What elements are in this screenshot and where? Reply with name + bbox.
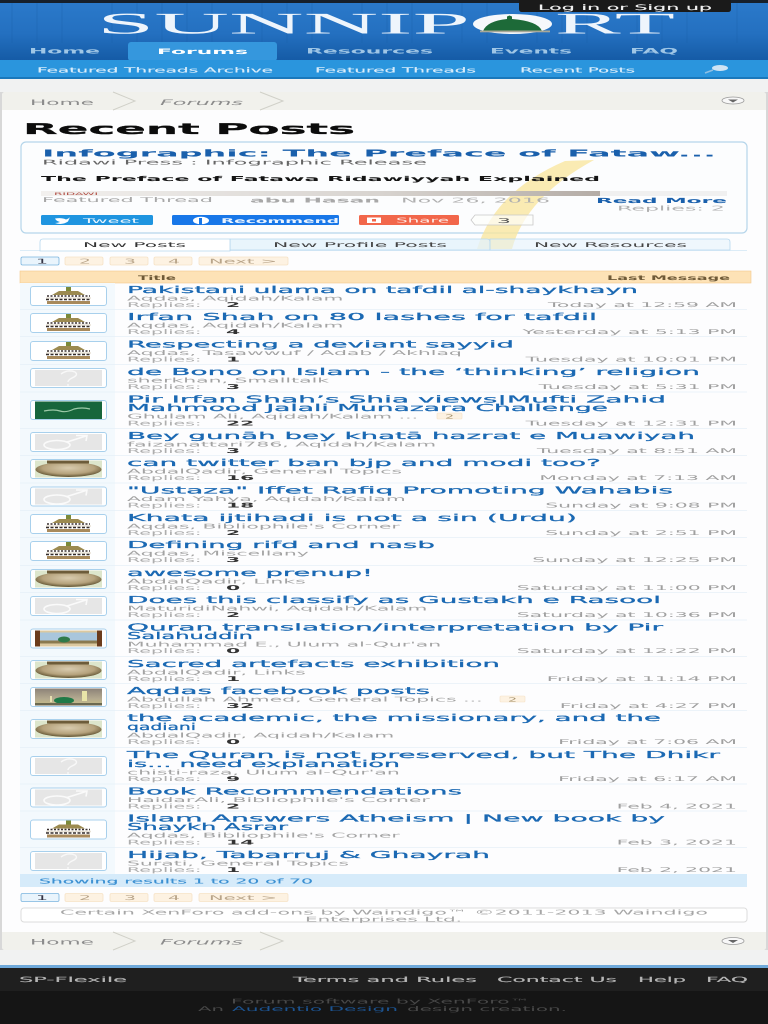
author and forum: Surati, General Topics [127, 859, 351, 867]
avatar [30, 596, 106, 616]
replies [127, 383, 241, 391]
breadcrumb bottom: Home [30, 938, 95, 946]
table header [20, 271, 751, 283]
last message date: Today at 12:59 AM [545, 301, 738, 309]
avatar [30, 460, 106, 478]
thread title: Aqdas facebook posts [127, 686, 430, 697]
main navigation: Events [490, 46, 574, 56]
replies [127, 502, 256, 510]
row 19 [30, 814, 737, 846]
button: recommend [172, 215, 340, 225]
replies: 32 [226, 702, 256, 710]
row 13 [30, 622, 738, 655]
thread title: Defining rifd and nasb [127, 540, 435, 551]
avatar [30, 688, 106, 706]
author and forum: AbdalQadir, Aqidah/Kalam [127, 731, 394, 739]
thread meta: abu Hasan [250, 196, 381, 204]
replies [127, 420, 256, 428]
featured subtitle: Ridawi Press : Infographic Release [42, 158, 427, 166]
replies: Replies: [127, 502, 201, 510]
footer links: FAQ [706, 975, 749, 984]
replies: Replies: [127, 775, 201, 783]
thread title: Pir Irfan Shah’s Shia views|Mufti Zahid [127, 394, 666, 406]
infographic image strip [41, 191, 727, 196]
avatar [30, 514, 106, 534]
last message date: Feb 3, 2021 [617, 838, 737, 846]
replies: Replies: [127, 356, 201, 364]
replies: Replies: [127, 802, 201, 810]
replies: 1 [226, 866, 241, 874]
avatar [30, 342, 106, 360]
tabs [20, 239, 747, 251]
tab: new posts: New Posts [83, 241, 188, 249]
icon: search [705, 65, 728, 73]
thread title: Hijab, Tabarruj & Ghayrah [127, 850, 490, 861]
row 15 [30, 686, 738, 710]
last message date: Saturday at 12:22 PM [517, 647, 738, 655]
thread title: Khata ijtihadi is not a sin (Urdu) [127, 513, 577, 524]
last message date: Yesterday at 5:13 PM [519, 328, 738, 336]
button: tweet [41, 215, 153, 225]
replies [127, 447, 241, 455]
replies: Replies: [127, 383, 201, 391]
header banner [0, 0, 768, 61]
replies [127, 866, 241, 874]
results summary bar [20, 874, 747, 887]
decorative yellow swoosh [477, 160, 594, 249]
replies: 1 [226, 675, 241, 683]
avatar [30, 660, 106, 680]
last message date: Saturday at 11:00 PM [517, 584, 738, 592]
thread title: Does this classify as Gustakh e Rasool [127, 595, 661, 606]
credits: Forum software by XenForo™ [231, 998, 530, 1006]
author and forum: Adam Yahya, Aqidah/Kalam [127, 495, 406, 503]
page badge: 2 [445, 414, 454, 420]
replies: Replies: [127, 738, 201, 746]
replies: 3 [226, 383, 241, 391]
sub navigation bar [0, 60, 768, 79]
replies [127, 611, 241, 619]
thread title: is... need explanation [127, 759, 400, 770]
row 17 [30, 750, 738, 783]
row 14 [30, 659, 738, 683]
replies: Replies: [127, 584, 201, 592]
replies: Replies: [127, 556, 201, 564]
thread title [127, 814, 666, 833]
last message date: Friday at 11:14 PM [547, 675, 738, 683]
pagination bottom: Next > [209, 894, 277, 902]
main navigation: FAQ [630, 46, 678, 56]
last message date: Feb 2, 2021 [617, 866, 737, 874]
copyright notice: Certain XenForo add-ons by Waindigo™ ©2011-2013 Waindigo [60, 908, 708, 916]
thread title: Sacred artefacts exhibition [127, 659, 500, 670]
thread title: awesome prenup! [127, 568, 373, 579]
sub navigation bar: Recent Posts [520, 66, 636, 74]
replies [127, 301, 241, 309]
replies: Replies: [127, 866, 201, 874]
author and forum: Abdullah Ahmed, General Topics ... [127, 695, 483, 703]
avatar [30, 629, 106, 648]
replies [127, 328, 241, 336]
author and forum: faizanattari786, Aqidah/Kalam [127, 440, 436, 448]
replies: 9 [226, 775, 241, 783]
replies: Replies: [127, 702, 201, 710]
avatar [30, 720, 106, 738]
tab: new resources: New Resources [534, 241, 689, 249]
thread title: the academic, the missionary, and the [127, 713, 661, 724]
pagination top: Next > [209, 258, 277, 266]
copyright notice: Enterprises Ltd. [305, 916, 462, 924]
thread meta: Featured Thread [42, 196, 213, 204]
page badge [437, 413, 462, 420]
tab: new profile posts: New Profile Posts [273, 241, 449, 249]
breadcrumb bottom: Forums [160, 938, 243, 946]
button: recommend: Recommend [221, 217, 340, 225]
last message date: Monday at 7:13 AM [539, 474, 738, 482]
thread title: can twitter ban bjp and modi too? [127, 458, 601, 469]
author and forum: Aqdas, Miscellany [127, 549, 309, 557]
row 3 [30, 340, 738, 364]
table header: Last Message [607, 274, 732, 282]
last message date: Sunday at 12:25 PM [532, 556, 738, 564]
avatar [30, 432, 106, 452]
pagination bottom: 1 [36, 894, 48, 902]
row 18 [30, 786, 737, 810]
author and forum: HaidarAli, Bibliophile's Corner [127, 796, 431, 804]
icon: collapse toggle [722, 938, 744, 944]
thread title: Respecting a deviant sayyid [127, 340, 514, 350]
thread title: de Bono on Islam - the ‘thinking’ religion [127, 367, 700, 378]
row 10 [30, 540, 738, 564]
replies: Replies: [127, 611, 201, 619]
replies: 14 [226, 838, 256, 846]
page badge: 2 [508, 696, 517, 704]
avatar [30, 487, 106, 506]
pagination top: 1 [36, 258, 48, 266]
avatar [30, 570, 106, 588]
replies [127, 529, 241, 537]
thread meta [42, 196, 728, 212]
row 16 [30, 713, 738, 746]
row 20 [30, 850, 737, 874]
row 4 [30, 367, 738, 391]
credits [198, 998, 567, 1013]
author and forum: AbdalQadir, Links [127, 668, 307, 676]
panel: featured thread [21, 142, 747, 249]
last message date: Friday at 6:17 AM [558, 775, 738, 783]
replies [127, 356, 241, 364]
author and forum: Aqdas, Aqidah/Kalam [127, 294, 343, 302]
avatar [30, 788, 106, 807]
avatar [30, 368, 106, 388]
last message date: Sunday at 9:08 PM [545, 502, 738, 510]
replies: 4 [226, 328, 241, 336]
tab: new posts [40, 239, 230, 251]
replies [127, 556, 241, 564]
breadcrumb bottom [2, 932, 766, 950]
replies [127, 802, 241, 810]
replies: 22 [226, 420, 256, 428]
footer links: Contact Us [497, 975, 618, 984]
footer links: SP-Flexile [19, 975, 129, 984]
replies [127, 702, 256, 710]
replies: 3 [226, 556, 241, 564]
pagination bottom [21, 894, 288, 902]
replies [127, 584, 241, 592]
replies: 2 [226, 301, 241, 309]
replies [127, 775, 241, 783]
main navigation [29, 42, 678, 61]
last message date: Tuesday at 10:01 PM [523, 356, 738, 364]
author and forum: MaturidiNahwi, Aqidah/Kalam [127, 604, 427, 612]
main navigation: Resources [306, 46, 435, 56]
login tab: Log in or Sign up [538, 3, 713, 12]
main navigation: Home [29, 46, 100, 56]
thread title: Book Recommendations [127, 786, 462, 798]
page badge [500, 696, 525, 704]
thread title [127, 713, 661, 733]
author and forum: Aqdas, Bibliophile's Corner [127, 522, 401, 530]
replies: Replies: [127, 529, 201, 537]
avatar [30, 852, 106, 870]
credits: Audentio Design [232, 1005, 398, 1013]
thread title [124, 750, 720, 770]
replies [127, 675, 241, 683]
replies: 2 [226, 611, 241, 619]
thread title [127, 622, 663, 642]
replies: 1 [226, 356, 241, 364]
row 2 [30, 312, 738, 336]
share count [471, 215, 533, 225]
pagination top: 2 [79, 258, 91, 266]
last message date: Tuesday at 12:31 PM [523, 420, 738, 428]
tab: new resources [490, 239, 730, 250]
thread title: qadiani [127, 722, 196, 733]
thread list [20, 283, 747, 874]
sub navigation bar: Featured Threads Archive [37, 66, 273, 74]
copyright notice [21, 908, 747, 924]
replies: 0 [226, 738, 241, 746]
row 8 [30, 486, 738, 510]
thread title: Bey gunāh bey khatā hazrat e Muawiyah [127, 431, 695, 442]
replies [127, 474, 256, 482]
author and forum: Aqdas, Bibliophile's Corner [127, 831, 401, 839]
avatar [30, 820, 106, 839]
pagination top [21, 257, 288, 266]
breadcrumb top: Home [30, 98, 95, 107]
thread title: Irfan Shah on 80 lashes for tafdil [127, 312, 597, 323]
thread title: Mahmood Jalali Munazara Challenge [127, 403, 608, 414]
replies: 2 [226, 802, 241, 810]
avatar [30, 400, 106, 420]
credits: An [198, 1005, 224, 1013]
avatar [30, 286, 106, 306]
thread meta: Read More [596, 197, 728, 205]
avatar [30, 542, 106, 560]
replies: 0 [226, 584, 241, 592]
pagination bottom: 2 [79, 894, 91, 902]
share count: 3 [497, 217, 511, 225]
row 11 [30, 568, 738, 592]
pagination bottom: 4 [168, 894, 180, 902]
author and forum: AbdalQadir, Links [127, 577, 307, 585]
login tab [519, 0, 731, 12]
replies: 18 [226, 502, 256, 510]
tab: new profile posts [230, 239, 490, 250]
author and forum: Aqdas, Tasawwuf / Adab / Akhlaq [127, 349, 462, 357]
featured title: Infographic: The Preface of Fataw... [42, 148, 716, 160]
results summary bar: Showing results 1 to 20 of 70 [39, 877, 313, 885]
button: tweet: Tweet [80, 217, 140, 225]
table header: Title [138, 274, 178, 282]
last message date: Friday at 4:27 PM [560, 702, 738, 710]
replies: 2 [226, 529, 241, 537]
replies: Replies: [127, 647, 201, 655]
site logo: SUNNIP [97, 8, 470, 40]
avatar [30, 756, 106, 776]
replies: Replies: [127, 474, 201, 482]
author and forum: sherkhan, Smalltalk [127, 376, 330, 384]
avatar [30, 314, 106, 332]
replies: Replies: [127, 447, 201, 455]
footer links: Terms and Rules [290, 975, 478, 984]
thread title [127, 394, 666, 414]
thread title: Shaykh Asrar [127, 822, 288, 833]
last message date: Feb 4, 2021 [617, 802, 737, 810]
thread title: Quran translation/interpretation by Pir [127, 622, 663, 634]
replies [127, 738, 241, 746]
site logo [97, 8, 675, 40]
row 6 [30, 431, 738, 455]
replies: Replies: [127, 675, 201, 683]
site logo: RT [555, 8, 675, 40]
author and forum: Aqdas, Aqidah/Kalam [127, 321, 343, 329]
thread title: Salahuddin [127, 631, 253, 642]
last message date: Sunday at 2:51 PM [545, 529, 738, 537]
last message date: Tuesday at 5:31 PM [535, 383, 738, 391]
replies: Replies: [127, 420, 201, 428]
footer links: Help [638, 975, 687, 984]
button: share [359, 215, 459, 225]
author and forum: Ghulam Ali, Aqidah/Kalam ... [127, 412, 418, 420]
replies: Replies: [127, 838, 201, 846]
button: share: Share [396, 216, 449, 224]
featured headline: The Preface of Fatawa Ridawiyyah Explained [41, 175, 600, 183]
replies [127, 838, 256, 846]
main navigation: Forums [157, 47, 250, 56]
last message date: Tuesday at 8:51 AM [534, 447, 738, 455]
last message date: Friday at 7:06 AM [558, 738, 738, 746]
heading: Recent Posts [23, 120, 355, 138]
replies: Replies: [127, 301, 201, 309]
author and forum: Muhammad E., Ulum al-Qur'an [127, 640, 441, 648]
site footer [0, 965, 768, 1024]
credits: design creation. [407, 1005, 567, 1013]
sub navigation bar: Featured Threads [315, 66, 477, 74]
replies: 3 [226, 447, 241, 455]
row 12 [30, 595, 738, 619]
thread title: "Ustaza" Iffet Rafiq Promoting Wahabis [127, 486, 673, 496]
thread title: Pakistani ulama on tafdil al-shaykhayn [127, 285, 638, 296]
icon: collapse toggle [722, 97, 744, 104]
author and forum: chisti-raza, Ulum al-Qur'an [127, 768, 400, 776]
row 7 [30, 458, 738, 482]
footer links [19, 975, 749, 984]
replies [127, 647, 241, 655]
pagination top: 4 [168, 258, 180, 266]
last message date: Saturday at 10:36 PM [517, 611, 738, 619]
author and forum: AbdalQadir, General Topics [127, 467, 404, 475]
thread title: Islam Answers Atheism | New book by [127, 814, 666, 824]
row 5 [30, 394, 738, 428]
replies: 16 [226, 474, 256, 482]
breadcrumb top: Forums [160, 98, 243, 107]
thread meta: Nov 26, 2016 [401, 196, 550, 204]
row 1 [30, 285, 738, 309]
replies: Replies: [127, 328, 201, 336]
pagination bottom: 3 [124, 894, 136, 902]
row 9 [30, 513, 738, 537]
thread meta: Replies: 2 [617, 204, 725, 212]
infographic image strip: RIDAWI [54, 192, 98, 196]
thread title: The Quran is not preserved, but The Dhikr [124, 750, 720, 761]
pagination top: 3 [124, 258, 136, 266]
replies: 0 [226, 647, 241, 655]
breadcrumb top [2, 92, 766, 110]
